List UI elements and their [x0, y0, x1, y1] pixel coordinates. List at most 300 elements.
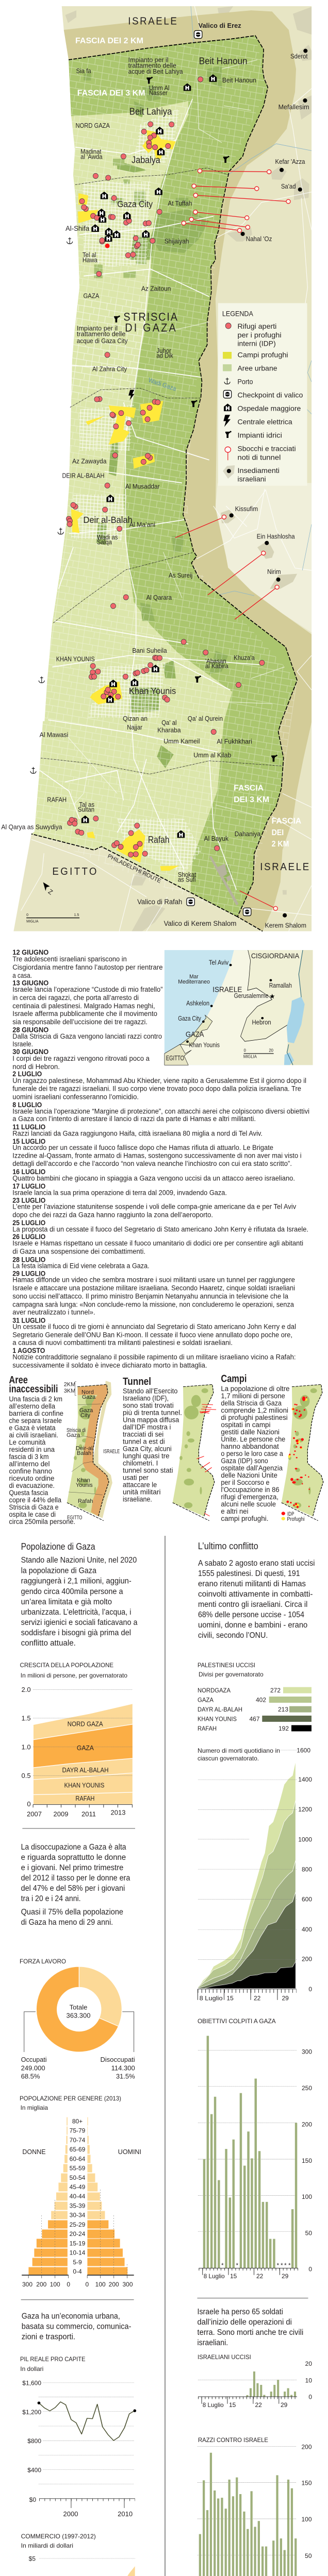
hospitals	[81, 74, 217, 838]
map place labels: Wadi Gaza	[147, 376, 177, 393]
chart: population pyramid: DONNE	[22, 2148, 46, 2156]
map place labels: Bani Suheila	[132, 647, 167, 654]
chart: Israelis killed: 29	[281, 2401, 288, 2409]
chart: population pyramid: 40-44	[70, 2193, 86, 2200]
chart: palestinians killed by governorate: Divisi per governatorato	[199, 1671, 264, 1678]
map place labels: KHAN YOUNIS	[56, 655, 95, 663]
map place labels: Al Ma'ani	[129, 521, 155, 528]
chart: rockets against Israel	[198, 2436, 312, 2576]
map place labels: At Tuffah	[168, 200, 192, 207]
chart: population growth: KHAN YOUNIS	[64, 1782, 105, 1789]
text block: fascia di 3 km	[9, 1453, 48, 1461]
map place labels: trattamento delle	[77, 330, 126, 338]
25 luglio	[12, 1218, 308, 1233]
30 giugno: 30 GIUGNO	[12, 1047, 48, 1056]
chart: daily deaths stacked area: 1200	[298, 1806, 312, 1813]
locator inset map: Tel Aviv	[209, 959, 228, 967]
text block: campi profughi.	[221, 1515, 268, 1522]
13 giugno: in cerca dei ragazzi, che porta all’arresto di	[12, 994, 139, 1002]
map place labels: Kharaba	[157, 726, 181, 734]
26 luglio: di Gaza una sospensione dei combattimenti.	[12, 1247, 145, 1255]
chart: population pyramid: 25-29	[70, 2221, 86, 2228]
map place labels: Hawa	[83, 256, 97, 264]
chart: real GDP per capita: In dollari	[20, 2365, 43, 2372]
small map of inaccessible areas: City	[80, 1413, 90, 1419]
border fence dashed line	[31, 36, 297, 931]
1 agosto	[12, 1346, 296, 1369]
chart: population pyramid: 100	[50, 2281, 60, 2288]
map place labels: Nasser	[149, 89, 168, 97]
chart: targets hit in Gaza: 150	[302, 2157, 312, 2164]
map place labels: ISRAELE	[128, 15, 177, 27]
main map of the Gaza Strip	[1, 6, 313, 1065]
13 giugno	[12, 979, 163, 1026]
map place labels: Al Qarara	[146, 594, 172, 601]
small map of inaccessible areas: Deir-al	[76, 1446, 92, 1452]
28 giugno: Israele.	[12, 1040, 33, 1048]
text block: barriera di confine	[9, 1410, 63, 1417]
chart: palestinians killed by governorate: 467	[249, 1716, 260, 1723]
chart: Israelis killed: 8 Luglio	[203, 2401, 224, 2409]
31 luglio: 31 LUGLIO	[12, 1316, 45, 1324]
buffer zone labels: FASCIA	[272, 817, 301, 826]
chart: population growth: DAYR AL-BALAH	[62, 1766, 108, 1774]
text block: servizi igienici e sociali faticavano a	[21, 1618, 138, 1627]
map place labels: Kissufim	[235, 505, 258, 513]
settlements areas	[65, 6, 311, 931]
text block: Israeli losses	[197, 2308, 303, 2347]
small map of inaccessible areas	[64, 1381, 120, 1521]
map place labels: Az Zaitoun	[141, 285, 171, 293]
map place labels: Al Mawasi	[40, 731, 68, 738]
text block: conflitto attuale.	[21, 1639, 76, 1648]
map place labels: Impianto per il	[77, 325, 118, 332]
chart: population pyramid: 35-39	[70, 2202, 86, 2209]
chart: real GDP per capita: $0	[29, 2496, 36, 2503]
map place labels: Valico di Erez	[199, 22, 241, 29]
12 giugno: Tre adolescenti israeliani spariscono in	[12, 955, 127, 963]
text block: unemployment: del 47% e del 58% per i giovani	[21, 1884, 125, 1893]
locator inset map: GAZA	[186, 1030, 204, 1039]
chart: palestinians killed by governorate: 192	[278, 1725, 289, 1732]
chart: real GDP per capita: $400	[27, 2466, 41, 2473]
text block: la popolazione di Gaza	[21, 1566, 96, 1575]
heading: L’ultimo conflitto	[198, 1541, 258, 1551]
locator inset map: Ramallah	[269, 981, 292, 989]
chart: targets hit in Gaza: 200	[302, 2121, 312, 2128]
small map of camps: Profughi	[287, 1516, 304, 1522]
locator inset map: 20	[269, 1048, 273, 1053]
chart: real GDP per capita: $1,600	[22, 2379, 41, 2386]
13 giugno: sia responsabile dell’uccisione dei tre ragazzi.	[12, 1018, 147, 1026]
text block: copre il 44% della	[9, 1496, 61, 1504]
chart: palestinians killed by governorate: NORDGAZA	[198, 1687, 231, 1694]
chart: population growth: 2013	[111, 1808, 125, 1817]
map place labels: Rafah	[148, 834, 170, 845]
31 luglio	[12, 1316, 296, 1347]
map place labels: Ein Hashlosha	[257, 533, 295, 540]
text block: circa 250mila persone.	[9, 1518, 75, 1526]
map place labels: As Sureij	[169, 571, 192, 579]
chart: real GDP per capita: 2000	[63, 2510, 78, 2518]
buffer zone labels: FASCIA DEI 3 KM	[77, 89, 145, 98]
chart: daily deaths stacked area: 400	[302, 1926, 312, 1933]
chart: targets hit in Gaza: OBIETTIVI COLPITI A GAZA	[198, 2018, 276, 2025]
chart: population pyramid	[20, 2095, 141, 2288]
heading: Popolazione di Gaza	[21, 1541, 95, 1552]
30 giugno	[12, 1047, 150, 1071]
map place labels: Nirim	[267, 568, 281, 575]
urban areas	[84, 65, 232, 886]
text block: tunnel a est di	[123, 1437, 165, 1445]
chart: Israelis killed	[198, 2353, 312, 2409]
text block: e altri nei	[221, 1507, 249, 1515]
chart: daily deaths stacked area: 1000	[298, 1836, 312, 1843]
chart: labour force donut: Totale	[70, 2003, 87, 2011]
chart: population pyramid: In migliaia	[21, 2104, 48, 2111]
map place labels: Mefallesim	[278, 104, 309, 111]
map place labels: al Kabira	[205, 663, 228, 670]
chart: population pyramid: 70-74	[70, 2137, 86, 2144]
28 giugno	[12, 1026, 162, 1048]
legend: LEGENDA	[222, 310, 253, 317]
text block: ospita le case di	[9, 1511, 56, 1518]
panel: campi	[221, 1374, 323, 1522]
29 luglio: sono uccisi nell’attacco. Il primo ministro Benjamin Netanyahu annuncia in televisione che la	[12, 1292, 288, 1300]
small map of inaccessible areas: Gaza	[67, 1432, 80, 1438]
legend: Impianti idrici	[237, 431, 282, 439]
map place labels: Sia fa	[76, 67, 91, 75]
map place labels: EGITTO	[52, 866, 96, 877]
chart: labour force donut: 363.300	[66, 2011, 91, 2020]
chart: palestinians killed by governorate: RAFAH	[198, 1725, 217, 1732]
text block	[221, 1385, 290, 1522]
text block: dall’IDF mostra i	[123, 1423, 171, 1431]
chart: population growth	[20, 1662, 133, 1818]
chart: targets hit in Gaza: 300	[302, 2048, 312, 2056]
timeline of events	[12, 948, 309, 1369]
2 luglio: 2 LUGLIO	[12, 1070, 42, 1078]
text block: attaccare le	[123, 1481, 157, 1488]
text block: urbanizzata. L’elettricità, l’acqua, i	[21, 1608, 131, 1617]
map place labels: DEIR AL-BALAH	[62, 472, 104, 480]
map place labels: Juhor	[156, 347, 171, 354]
1 agosto: successivamente il soldato è invece dichiarato morto in battaglia.	[12, 1361, 207, 1369]
text block: o perso le loro case a	[221, 1450, 283, 1458]
buffer zone labels: FASCIA DEI 2 KM	[75, 36, 143, 45]
29 luglio: Hamas diffonde un video che sembra mostrare i suoi militanti usare un tunnel per raggiungere	[12, 1276, 295, 1284]
text block: usati per	[123, 1473, 149, 1481]
text block: Israeli losses: dall’inizio delle operazioni di	[197, 2318, 292, 2327]
text block: che separa Israele	[9, 1417, 62, 1425]
chart: population growth: 2009	[54, 1810, 68, 1818]
map place labels: Wadi as	[97, 533, 118, 541]
text block: ricevuto ordine	[9, 1475, 54, 1482]
locator inset map: Gerusalemme	[234, 992, 269, 999]
2 luglio	[12, 1070, 306, 1101]
13 giugno: Israele afferma pubblicamente che il movimento	[12, 1010, 157, 1018]
chart: targets hit in Gaza: *	[221, 2262, 224, 2269]
chart: population growth: 0	[27, 1800, 31, 1808]
chart: labour force donut: 249.000	[21, 2064, 45, 2072]
text block: delle Nazioni Unite	[221, 1471, 277, 1479]
text block: Una mappa diffusa	[123, 1416, 179, 1423]
map place labels	[1, 15, 309, 929]
chart: population pyramid: 45-49	[70, 2183, 86, 2191]
text block: per il Soccorso e	[221, 1479, 269, 1486]
legend: Rifugi aperti	[237, 322, 276, 330]
chart: labour force donut: FORZA LAVORO	[20, 1958, 66, 1965]
chart: population pyramid: 75-79	[70, 2127, 86, 2134]
chart: population growth: GAZA	[77, 1744, 94, 1752]
buffer zone labels: FASCIA	[234, 784, 264, 793]
23 luglio: 23 LUGLIO	[12, 1196, 45, 1204]
map place labels: Umm al Kilab	[193, 751, 232, 759]
chart: real GDP per capita: 2010	[118, 2510, 133, 2518]
text block: comprende 1,2 milioni	[221, 1406, 288, 1414]
chart: trade: $5	[29, 2555, 36, 2563]
locator inset map: Ashkelon	[186, 999, 209, 1007]
26 luglio: 26 LUGLIO	[12, 1232, 45, 1241]
8 luglio: Israele lancia l’operazione “Margine di protezione”, con attacchi aerei che colpiscono diversi obiettivi	[12, 1108, 309, 1115]
small map of inaccessible areas: Gaza	[79, 1408, 93, 1414]
north arrow and scale: 1.5	[74, 912, 79, 917]
text block	[198, 1559, 315, 1640]
map place labels: Beit Hanoun	[222, 76, 256, 84]
chart: daily deaths stacked area: 800	[302, 1866, 312, 1873]
chart: population pyramid: 200	[109, 2281, 119, 2288]
map place labels: Tal as	[79, 801, 94, 808]
buffer zone labels: DEI	[272, 828, 284, 837]
11 luglio: 11 LUGLIO	[12, 1123, 45, 1131]
text block: un’area limitata e già molto	[21, 1598, 112, 1606]
28 luglio: 28 LUGLIO	[12, 1255, 45, 1263]
chart: daily deaths stacked area: Numero di morti quotidiano in	[198, 1747, 280, 1754]
text block	[9, 1395, 75, 1526]
map place labels: Khan Younis	[129, 686, 176, 696]
map place labels: acque di Gaza City	[77, 337, 128, 345]
chart: targets hit in Gaza: 0	[308, 2265, 312, 2273]
locator inset map: 0	[244, 1048, 246, 1053]
legend: Ospedale maggiore	[237, 404, 301, 413]
chart: palestinians killed by governorate: 402	[256, 1696, 266, 1703]
text block: di profughi palestinesi	[221, 1414, 288, 1421]
text block: confine hanno	[9, 1467, 52, 1475]
16 luglio: Quattro bambini che giocano in spiaggia a Gaza vengono uccisi da un attacco aereo israeliano.	[12, 1175, 295, 1182]
chart: population growth: 2.0	[22, 1686, 31, 1693]
roads in Israel	[21, 6, 311, 931]
map place labels: Umm Kameil	[163, 737, 200, 745]
map place labels: acque di Beit Lahiya	[128, 67, 183, 75]
text block: unemployment	[21, 1843, 130, 1927]
text block: Israeli losses: terra. Sono morti anche tre civili	[197, 2328, 303, 2337]
map place labels: Jabalya	[132, 155, 160, 165]
text block: unemployment: e riguarda soprattutto le donne	[21, 1853, 126, 1862]
legend: Checkpoint di valico	[237, 391, 303, 399]
chart: population pyramid: 0	[67, 2281, 70, 2288]
11 luglio: Razzi lanciati da Gaza raggiungono Haifa, città israeliana 80 miglia a nord di Tel Aviv.	[12, 1130, 263, 1138]
text block: unemployment: del 2012 il tasso per le donne era	[21, 1874, 130, 1883]
chart: real GDP per capita: $1,200	[22, 2409, 41, 2416]
locator inset map: MIGLIA	[243, 1054, 257, 1059]
small map of inaccessible areas: EGITTO	[67, 1515, 83, 1521]
text block: A sabato 2 agosto erano stati uccisi	[198, 1559, 315, 1568]
legend: Insediamenti	[237, 466, 280, 474]
text block: unemployment: La disoccupazione a Gaza è alta	[21, 1843, 126, 1852]
text block: sono stati trovati	[123, 1401, 174, 1409]
chart: palestinians killed by governorate: GAZA	[198, 1696, 214, 1703]
locator inset map: Hebron	[252, 1019, 271, 1026]
map place labels: Kerem Shalom	[265, 922, 306, 929]
16 luglio	[12, 1167, 295, 1182]
chart: palestinians killed by governorate: PALESTINESI UCCISI	[198, 1662, 255, 1669]
text block: Gaza City, alcuni	[123, 1445, 172, 1452]
text block: coinvolti attivamente in combatti-	[198, 1590, 313, 1599]
23 luglio: dopo che dei razzi da Gaza hanno raggiunto la zona dell’aeroporto.	[12, 1211, 213, 1219]
chart: palestinians killed by governorate: KHAN YOUNIS	[198, 1716, 237, 1723]
11 luglio	[12, 1123, 263, 1138]
29 luglio: Israele e attaccare una postazione militare israeliana. Secondo Haaretz, cinque soldati israeliani	[12, 1284, 295, 1292]
map place labels: Dahaniya	[235, 831, 260, 838]
map place labels: Umm Al	[149, 84, 170, 92]
chart: palestinians killed by governorate: DAYR AL-BALAH	[198, 1706, 242, 1713]
31 luglio: a causa di nuovi combattimenti tra militanti palestinesi e soldati israeliani.	[12, 1339, 233, 1347]
map place labels: Shokat	[178, 871, 196, 878]
chart: population growth: 2011	[81, 1810, 96, 1818]
chart: targets hit in Gaza: 50	[305, 2230, 312, 2237]
small map of inaccessible areas: Striscia di	[67, 1427, 86, 1433]
small map of inaccessible areas: Rafah	[78, 1498, 93, 1504]
text block: unemployment: e i giovani. Nel primo trimestre	[21, 1863, 123, 1872]
locator inset map: Mar	[189, 974, 199, 980]
text block: più di trenta tunnel.	[123, 1409, 182, 1416]
legend: Aree urbane	[237, 364, 277, 372]
chart: targets hit in Gaza: 29	[282, 2273, 289, 2280]
12 giugno: Cisgiordania mentre fanno l’autostop per rientrare	[12, 963, 163, 971]
north arrow and scale: MIGLIA	[26, 919, 39, 924]
1 agosto: Notizie contraddittorie segnalano il possibile rapimento di un militare israeliano vicino a Rafah:	[12, 1353, 296, 1361]
16 luglio: 16 LUGLIO	[12, 1167, 45, 1176]
map place labels: STRISCIA	[123, 311, 177, 324]
chart: population pyramid: 10-14	[70, 2249, 86, 2257]
chart: population pyramid: 200	[36, 2281, 47, 2288]
heading: inaccessibili	[9, 1384, 58, 1395]
legend: Centrale elettrica	[237, 418, 292, 426]
small map of inaccessible areas: Khan	[77, 1478, 90, 1484]
chart: population growth: 0.5	[22, 1772, 31, 1780]
legend: israeliani	[237, 475, 266, 483]
text block: della Striscia di Gaza	[221, 1399, 282, 1407]
text block: Israeliano (IDF),	[123, 1394, 169, 1402]
map place labels: Al Zahra City	[92, 365, 127, 373]
chart: population growth: 2007	[27, 1810, 42, 1818]
street network	[31, 36, 297, 917]
chart: daily deaths stacked area: 22	[254, 1995, 261, 2002]
chart: palestinians killed by governorate: 272	[270, 1687, 281, 1694]
text block: Unite. Le persone che	[221, 1435, 285, 1443]
chart: Israelis killed: 22	[255, 2401, 262, 2409]
heading	[9, 1375, 58, 1395]
chart: daily deaths stacked area: ciascun governatorato.	[198, 1755, 259, 1762]
map place labels: Al Fukhkhari	[217, 738, 252, 745]
map place labels: ISRAELE	[260, 861, 309, 873]
legend: Sbocchi e tracciati	[237, 445, 296, 453]
text block: tracciati di sei	[123, 1430, 163, 1438]
map place labels: Az Zawayda	[72, 457, 107, 465]
chart: palestinians killed by governorate	[198, 1662, 311, 1732]
text block: economy: zioni e trasporti.	[22, 2333, 75, 2342]
chart: population pyramid: 60-64	[70, 2155, 86, 2162]
chart: daily deaths stacked area: 1600	[297, 1747, 310, 1754]
chart: targets hit in Gaza: *	[281, 2262, 283, 2269]
text block: chilometri. I	[123, 1459, 158, 1467]
map place labels: Al Qarya as Suwydiya	[1, 823, 62, 831]
map place labels: as Sufi	[178, 876, 196, 884]
map place labels: Nahal 'Oz	[246, 235, 272, 243]
map place labels: Sultan	[78, 806, 94, 813]
8 luglio	[12, 1100, 309, 1123]
map place labels: Sderot	[290, 53, 308, 60]
map place labels: Najjar	[127, 723, 142, 731]
chart: population pyramid: 30-34	[70, 2212, 86, 2219]
15 luglio: Un accordo per un cessate il fuoco fallisce dopo che Hamas rifiuta di attuarlo. Le Brigate	[12, 1144, 273, 1151]
chart: population growth: RAFAH	[75, 1794, 94, 1802]
governorate boundaries	[41, 168, 284, 774]
text block: 68% delle persone uccise - 1054	[198, 1611, 304, 1619]
chart: population growth: 1.0	[22, 1743, 31, 1751]
small map of tunnels	[173, 1384, 216, 1521]
15 luglio: Izzedine al-Qassam, fronte armato di Hamas, sostengono successivamente di non aver mai visto i	[12, 1152, 302, 1160]
2 luglio: funerale dei tre ragazzi israeliani. Il suo corpo viene trovato poco dopo dalla polizia israeliana. Tre	[12, 1085, 301, 1093]
map place labels: Tel al	[83, 251, 96, 259]
chart: targets hit in Gaza: *	[236, 2262, 238, 2269]
text block: residenti in una	[9, 1446, 55, 1453]
chart: population pyramid: 100	[95, 2281, 106, 2288]
legend: Campi profughi	[237, 351, 288, 359]
13 giugno: 13 GIUGNO	[12, 979, 48, 987]
chart: population pyramid: 80+	[72, 2117, 83, 2125]
12 giugno: 12 GIUGNO	[12, 948, 48, 956]
text block: raggiungerà i 2,1 milioni, aggiun-	[21, 1577, 132, 1585]
23 luglio: L’ente per l’aviazione statunitense sospende i voli delle compa-gnie americane da e per Tel Aviv	[12, 1203, 297, 1211]
12 giugno: a casa.	[12, 972, 32, 979]
chart: population growth: 1.5	[22, 1715, 31, 1722]
text block: Gaza (IDP) sono	[221, 1457, 268, 1465]
text block: menti contro gli israeliani. Circa il	[198, 1600, 307, 1609]
map place labels: ad Dik	[156, 352, 173, 360]
text block: economy: Gaza ha un’economia urbana,	[22, 2312, 120, 2321]
chart: labour force donut: 114.300	[111, 2064, 135, 2072]
text block: lunghi quasi tre	[123, 1452, 170, 1460]
text block: Stando all’Esercito	[123, 1387, 177, 1395]
text block: ospitate dall’Agenzia	[221, 1464, 283, 1472]
map place labels: Deir al-Balah	[83, 515, 133, 525]
text block: Stando alle Nazioni Unite, nel 2020	[21, 1556, 137, 1565]
panel: aree inaccessibili	[9, 1375, 120, 1526]
small map of inaccessible areas: ISRAELE	[103, 1449, 120, 1455]
map place labels: Gaza City	[117, 199, 153, 209]
map place labels: Shijaiyah	[165, 238, 189, 245]
text block: hanno abbandonat	[221, 1443, 279, 1450]
map place labels: al 'Awda	[80, 153, 103, 161]
map place labels: 'Abasan	[205, 657, 226, 665]
map place labels: RAFAH	[47, 796, 67, 804]
text block: economy	[22, 2312, 131, 2342]
panel: l'ultimo conflitto	[197, 1541, 315, 2576]
2 luglio: uomini israeliani confesseranno l’omicidio.	[12, 1093, 139, 1101]
text block: soddisfare i bisogni già prima del	[21, 1629, 131, 1637]
small map of camps	[282, 1384, 323, 1522]
